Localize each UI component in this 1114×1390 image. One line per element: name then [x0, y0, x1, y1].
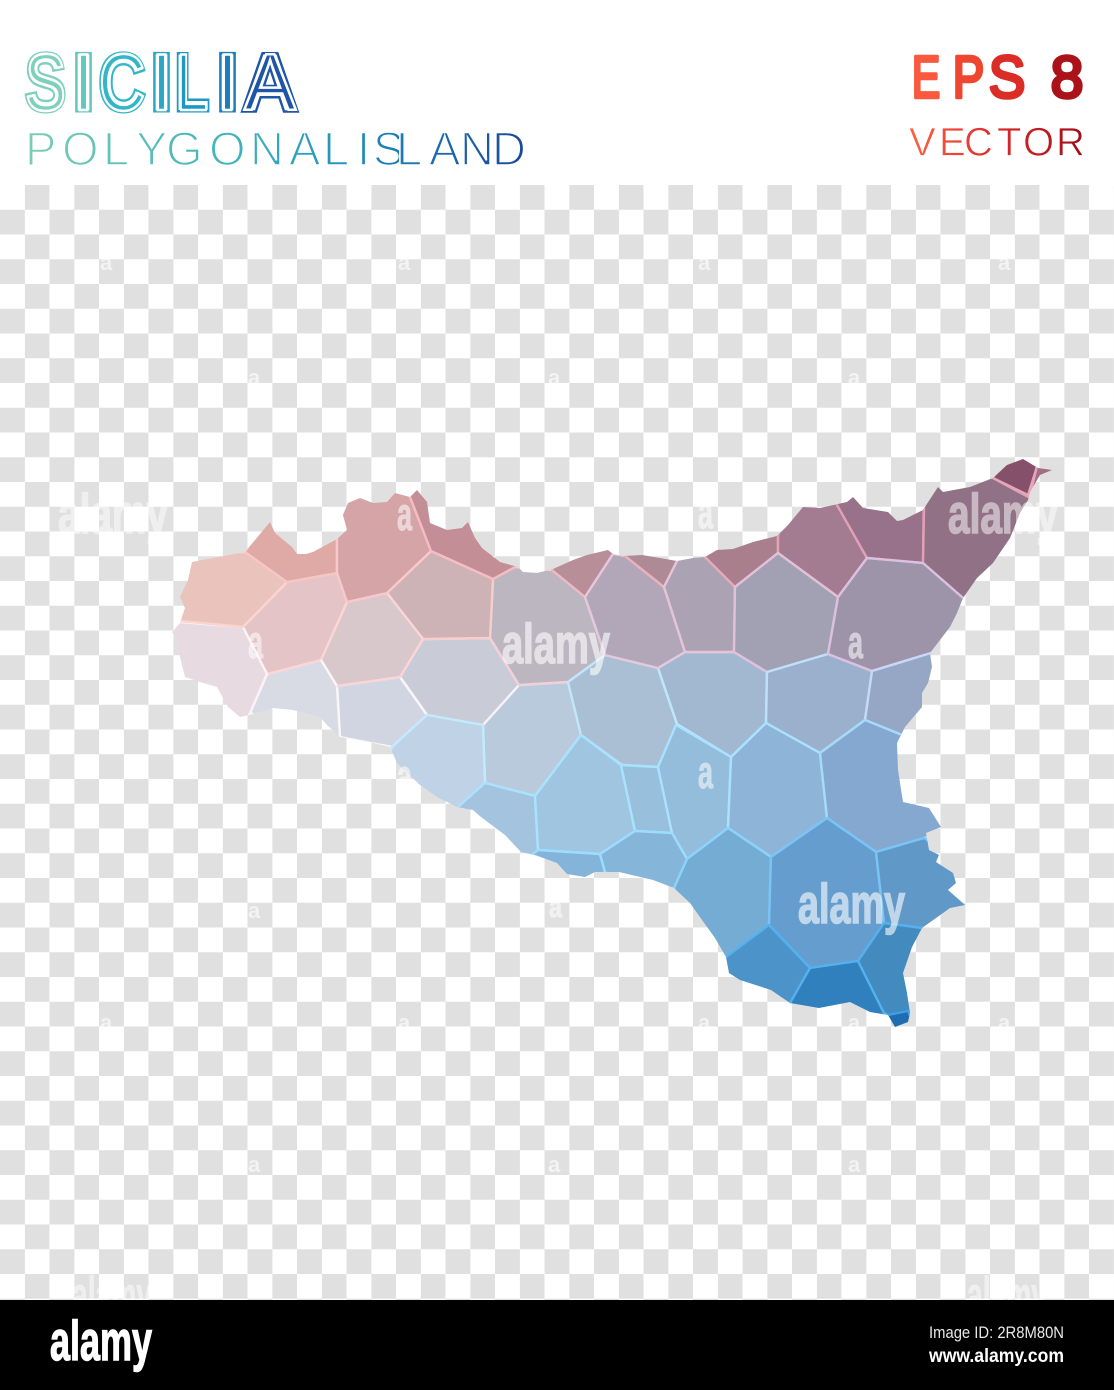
cell: central west lower [483, 682, 581, 796]
title: SICILIA: I [216, 38, 239, 128]
watermark: faint letters on checker: a [998, 250, 1011, 275]
watermark: faint letters on checker: a [698, 1010, 711, 1035]
subtitle: POLYGONAL ISLAND: POLYGONAL ISLAND [25, 122, 526, 175]
badge: EPS 8: S [989, 45, 1025, 111]
cell: Pozzallo coast [790, 961, 885, 1035]
cell: east coast [864, 652, 932, 735]
cell: east centre [766, 654, 872, 753]
cell: northwest inner [387, 551, 493, 639]
title: SICILIA: L [175, 37, 209, 127]
cell: north cape [337, 485, 431, 602]
cell: Catania plain [820, 718, 941, 851]
title: SICILIA: C [99, 37, 145, 128]
watermark: faint letters on checker: a [848, 1152, 861, 1177]
watermark: faint letters on checker: a [248, 365, 261, 390]
watermark: faint letters on checker: a [248, 898, 261, 923]
footer bar [0, 1300, 1114, 1390]
badge: EPS 8: E [912, 44, 940, 110]
cell: southeast coast [858, 923, 935, 1015]
cell: centre hexagon [728, 723, 827, 857]
cell: south coast small [530, 849, 604, 877]
cell: north inner 1 [585, 554, 685, 668]
badge: EPS 8: 8 [1051, 44, 1083, 110]
cell: north coast 5 [836, 497, 925, 562]
cell: Gela coast east [674, 828, 771, 957]
cell: north centre [490, 567, 605, 685]
cell: north coast 3 [704, 534, 778, 588]
title: SICILIA: A [244, 37, 296, 127]
title: SICILIA: A [242, 37, 298, 127]
cell: southwest coast [250, 664, 341, 732]
watermark: faint letters on checker [100, 250, 1011, 1177]
badge: VECTOR: VECTOR [909, 120, 1085, 164]
title: SICILIA: S [25, 38, 66, 128]
cell: northeast arm [922, 478, 1029, 599]
title: SICILIA: S [25, 38, 66, 128]
watermark: small letters: a [397, 750, 412, 802]
title: SICILIA: C [99, 37, 145, 128]
watermark: alamy west: alamy [58, 482, 168, 545]
watermark: alamy bottom right: alamy [967, 1267, 1047, 1323]
cell: Iblei [769, 818, 884, 968]
watermarks [58, 250, 1058, 1323]
cell: central [658, 652, 767, 757]
title: SICILIA: I [72, 38, 95, 128]
cell: north inner 2 [664, 545, 735, 652]
watermark: faint letters on checker: a [398, 250, 411, 275]
cell: Gela coast west [600, 831, 687, 892]
cell: Ragusa coast [710, 925, 810, 1005]
cell: Messina point [1029, 466, 1052, 496]
title: SICILIA: I [216, 38, 239, 128]
watermark: faint letters on checker: a [248, 1152, 261, 1177]
watermark: faint letters on checker: a [100, 250, 113, 275]
title: SICILIA: A [242, 37, 298, 127]
cell: west middle [321, 593, 423, 686]
watermark: faint letters on checker: a [100, 1010, 113, 1035]
cell: centre east narrow [658, 725, 731, 859]
watermark: small letters: a [397, 488, 412, 540]
title: SICILIA: L [176, 37, 208, 127]
watermark: faint letters on checker: a [698, 250, 711, 275]
cell: narrow south centre [621, 765, 672, 833]
watermark: faint letters on checker: a [548, 1152, 561, 1177]
watermark: faint letters on checker: a [548, 365, 561, 390]
footer: website: www.alamy.com [928, 1346, 1064, 1367]
watermark: alamy bottom left: alamy [72, 1267, 152, 1323]
cell: far west middle [243, 573, 347, 674]
cell: north coast 4 [776, 504, 866, 596]
cell: north coast 1 [550, 550, 613, 598]
cell: central west [568, 655, 677, 767]
cell: west centre lower [400, 638, 519, 725]
cell: Siracusa coast [876, 838, 975, 928]
cell: northwest bay [245, 510, 345, 582]
cell: Etna [826, 556, 964, 672]
title: SICILIA: I [72, 38, 95, 128]
watermark: small letters: a [698, 486, 713, 538]
watermark: small letters [248, 486, 863, 924]
title: SICILIA [25, 37, 298, 128]
title: SICILIA: I [150, 38, 173, 128]
cell: south centre left [535, 735, 635, 854]
cell: Palermo coast [409, 490, 517, 580]
title: SICILIA: L [175, 37, 209, 127]
title: SICILIA: I [72, 38, 95, 128]
watermark: small letters: a [848, 616, 863, 668]
title: SICILIA: S [25, 38, 66, 128]
map: polygonal Sicily island [160, 450, 1060, 1035]
watermark: small letters: a [698, 746, 713, 798]
watermark: alamy northeast: alamy [948, 482, 1058, 545]
title: SICILIA: I [216, 38, 239, 128]
watermark: faint letters on checker: a [848, 365, 861, 390]
cell: northwest corner [170, 552, 287, 627]
watermark: alamy centre: alamy [502, 612, 610, 675]
title: SICILIA: C [99, 37, 145, 128]
watermark: alamy southeast: alamy [798, 872, 905, 935]
cell: south west inner [385, 715, 485, 808]
cell: southern tip [885, 1011, 918, 1035]
footer: image id: Image ID: 2R8M80N [929, 1323, 1064, 1342]
cell: north coast 2 [624, 555, 678, 588]
cell: north east inner [734, 553, 838, 672]
watermark: faint letters on checker: a [398, 1010, 411, 1035]
badge: EPS 8: P [953, 46, 984, 111]
title: SICILIA: I [150, 38, 173, 128]
title: SICILIA: I [150, 38, 173, 128]
cell: Messina tip [992, 459, 1037, 496]
cell: western tip [172, 622, 268, 717]
watermark: small letters: a [248, 616, 263, 668]
footer logo: alamy: alamy [50, 1309, 152, 1372]
cell: Agrigento coast [456, 782, 537, 856]
cell: southwest inner [337, 677, 427, 747]
badge: EPS 8 [912, 44, 1083, 111]
watermark: faint letters on checker: a [848, 1010, 861, 1035]
watermark: small letters: a [549, 891, 562, 924]
watermark: faint letters on checker: a [998, 1010, 1011, 1035]
